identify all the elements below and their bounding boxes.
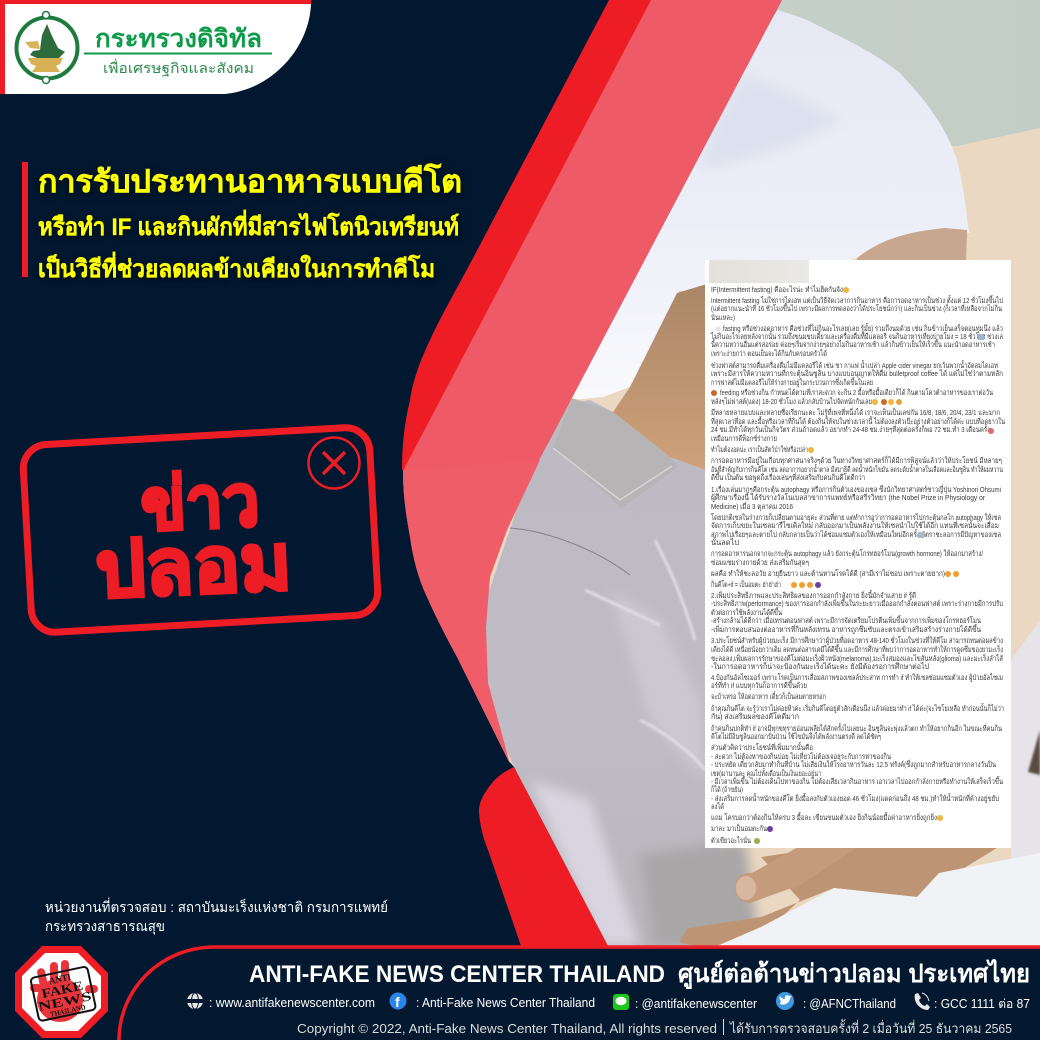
icon: phone (915, 993, 930, 1010)
stamp word 2: ปลอม (94, 518, 293, 614)
head skin (857, 228, 967, 262)
post text: -ในการอดอาหารก็น่าจะป้องกันมะเร็งได้นะคะ ยังมีต้องรอการศึกษาต่อไป (711, 661, 929, 671)
post text: Medicine) เมื่อ 3 ตุลาคม 2016 (711, 501, 793, 511)
post text: แถม โครบอกว่าต้องกินให้ครบ 3 มื้อละ เขียนขนมตัวเอง ยิ่งกินน้อยมื้อค่าอาหารยิ่งถูกยิ่ง (711, 812, 937, 822)
footer Thai organisation name: ศูนย์ต่อต้านข่าวปลอม ประเทศไทย (678, 958, 1030, 990)
cloth folds (702, 82, 829, 165)
title block (22, 162, 462, 283)
lower pink band segment (403, 460, 540, 764)
post text: คีโตไม่มีอินซูลินออกมาปั่นป่วน ใช้ไขมันจึงได้พลังงานตรงดี ลดได้ชัดๆ (711, 731, 881, 741)
post text: เซต)มานานละ คุณไปทั้งเดือนเป็นเงินเยอะอยู่นา (711, 768, 821, 778)
title line 2: หรือทำ IF และกินผักที่มีสารไฟโตนิวเทรียนท์ (38, 209, 459, 241)
card background (705, 260, 1011, 848)
post text: นั้นลดไป (711, 537, 739, 547)
header logo panel (0, 0, 311, 94)
stamp close icon (308, 438, 360, 488)
stamp word 1: ข่าว (139, 460, 261, 546)
post text: ดีขึ้น เป็นต้น ขอพูดถึงเรื่องเล่นๆที่ส่งเสริมกับคนกินคีโตดีกว่า (711, 472, 865, 482)
icon: facebook: f (395, 994, 400, 1010)
post text: เพราะง่ายกว่า ตอนเย็นจะได้กินกับครอบครัวได้ (711, 348, 827, 358)
post text: ผลคือ ทำให้ชะลอวัย อายุยืนยาว และต้านทานโรคได้ดี (สามีเราไม่ชอบ เพราะตายยาก) (711, 569, 945, 578)
translucent pink band (403, 0, 782, 760)
fake news stamp (22, 426, 379, 634)
icon: facebook (390, 992, 406, 1010)
thumb (734, 848, 820, 903)
logo rule (84, 52, 272, 54)
shirt highlight folds (619, 600, 702, 766)
footer organisation name: ANTI-FAKE NEWS CENTER THAILAND (249, 961, 665, 988)
shirt creases (585, 540, 705, 770)
lower red curved shape (479, 767, 608, 946)
hotline: : GCC 1111 ต่อ 87 (934, 997, 1030, 1011)
verification date: ได้รับการตรวจสอบครั้งที่ 2 เมื่อวันที่ 25 ธันวาคม 2565 (729, 1019, 1012, 1036)
white logo background (5, 4, 311, 94)
post text: อร์ที่ทำ if แบบทุกวันก็อาการดีขึ้นด้วย (711, 680, 807, 690)
shoulder seam (510, 528, 630, 575)
emoji marks in post (711, 287, 994, 844)
badge stamp text: ANTI (48, 973, 72, 987)
post text: จะบ้าเหรอ ให้อดอาหาร เดี๋ยวก็เป็นลมตายหรอก (711, 691, 826, 701)
logo title: กระทรวงดิจิทัล (95, 25, 262, 53)
post text: กัน) ส่งเสริมผลของคีโตดีมาก (711, 712, 799, 721)
post text: นั่นแหละ) (711, 312, 735, 322)
post text: มาละ มาเป็นอมตะกัน (711, 823, 767, 833)
post text: ก็ได้ (ถ้าขยัน) (711, 784, 743, 794)
logo subtitle: เพื่อเศรษฐกิจและสังคม (103, 59, 254, 77)
post text: เหมือนการดีท็อกซ์ร่างกาย (711, 433, 777, 443)
footer bar with curved red edge (119, 947, 1040, 1040)
screenshot card of the social post (705, 260, 1011, 848)
badge hand (30, 960, 98, 1022)
badge octagon (15, 946, 108, 1038)
post text: กินคีโต+if = เป็นอมตะ ฮ่าฮ่าฮ่า (711, 579, 781, 589)
verifying agency (45, 898, 388, 935)
website: : www.antifakenewscenter.com (209, 996, 375, 1010)
head cloth and white pillow (560, 10, 970, 410)
post text: -เพิ่มการตอบสนองต่ออาหารที่กินหลังเทรน อาหารถูกซึมซับและตรงเข้าเสริมสร้างร่างกายได้ดีขึ้น (711, 624, 981, 634)
badge stamp text: FAKE (40, 978, 84, 1001)
agency line 1: หน่วยงานที่ตรวจสอบ : สถาบันมะเร็งแห่งชาติ กรมการแพทย์ (45, 898, 388, 915)
hand (679, 846, 1000, 946)
post text: จัดการเก็บขยะในเซลมารีไซเคิลใหม่ กลับออกมาเป็นพลังงานให้เซลนำไปใช้ได้อีก แทนที่เซลนั้นจะเสื่อม (711, 520, 999, 530)
footer panel (119, 947, 1040, 1040)
copyright: Copyright © 2022, Anti-Fake News Center Thailand, All rights reserved (297, 1021, 717, 1036)
blurred profile header (709, 260, 809, 283)
red logo frame (0, 0, 311, 94)
shirt (480, 400, 720, 946)
post text: IF(Intermittent fasting) คืออะไรน่ะ ทำไมฮิตกันจัง (711, 285, 843, 294)
bright red diagonal band (402, 0, 660, 470)
twitter account: : @AFNCThailand (803, 997, 896, 1011)
post text: ลงได้ (711, 802, 724, 811)
white blanket (717, 853, 1040, 946)
line account: : @antifakenewscenter (635, 997, 757, 1011)
post text: ส่วนตัวคิดว่าประโยชน์ที่เพิ่มมากนั้นคือ (711, 742, 813, 752)
title line 3: เป็นวิธีที่ช่วยลดผลข้างเคียงในการทำคีโม (38, 251, 435, 283)
photo: patient in white head cloth (480, 0, 1040, 946)
post text: ตัวต่อการใช้พลังงานได้ดีขึ้น (711, 607, 782, 617)
dark lower shirt (640, 840, 760, 946)
post text: ผู้ศึกษาเรื่องนี้ ได้รับรางวัลโนเบลสาขาการแพทย์หรือสรีรวิทยา (the Nobel Prize in Physiology or (711, 492, 985, 502)
badge stamp text (30, 966, 96, 1021)
badge stamp text: THAILAND (49, 1002, 87, 1019)
post text (710, 285, 1005, 845)
neck (613, 284, 705, 470)
collar (553, 398, 678, 508)
icon: globe (187, 993, 203, 1009)
post text: ตัวเขียวอะไรนั่น (711, 835, 751, 845)
badge stamp text: NEWS (37, 988, 93, 1014)
post text: ซ่อมแซมร่างกายด้วย ส่งเสริมกันสุดๆ (711, 558, 809, 567)
title accent bar (22, 162, 28, 277)
photo beige background (480, 128, 1040, 946)
photo wall (703, 0, 1040, 150)
post text: หลังๆไม่ฟาสต์(แดง) 18-20 ชั่วโมง แล้วกลับบ้านไปจัดหนักกันเลย (711, 396, 872, 406)
icon: twitter (776, 992, 794, 1010)
post text: 2.เพิ่มประสิทธิภาพและประสิทธิผลของการออกกำลังกาย ยิ่งนี้มักจำแสาย if รู้ดี (711, 590, 916, 600)
icon: ministry emblem (16, 12, 78, 84)
right side lower blanket (1011, 620, 1040, 860)
stamp frame (22, 426, 379, 634)
post text: ทำไมต้องอดน่ะ เราเป็นสัตว์ป่าใช่หรือเปล่า (711, 444, 808, 454)
post text: การฟาสต์ไม่มีแคลอรีไม่ให้ร่างกายอยู่ในกระบวนการซึ่งเกิดขึ้นในเลย (711, 377, 873, 387)
facebook name: : Anti-Fake News Center Thailand (416, 996, 595, 1010)
anti fake news badge (15, 946, 108, 1038)
post text: - สะดวก ไม่ต้องหาของกินบ่อย ไม่เที่ยวไม่ต้องเจอธุระกับการหาของกิน (711, 751, 891, 761)
title line 1: การรับประทานอาหารแบบคีโต (38, 163, 462, 199)
agency line 2: กระทรวงสาธารณสุข (45, 918, 165, 935)
icon: line (613, 994, 629, 1010)
